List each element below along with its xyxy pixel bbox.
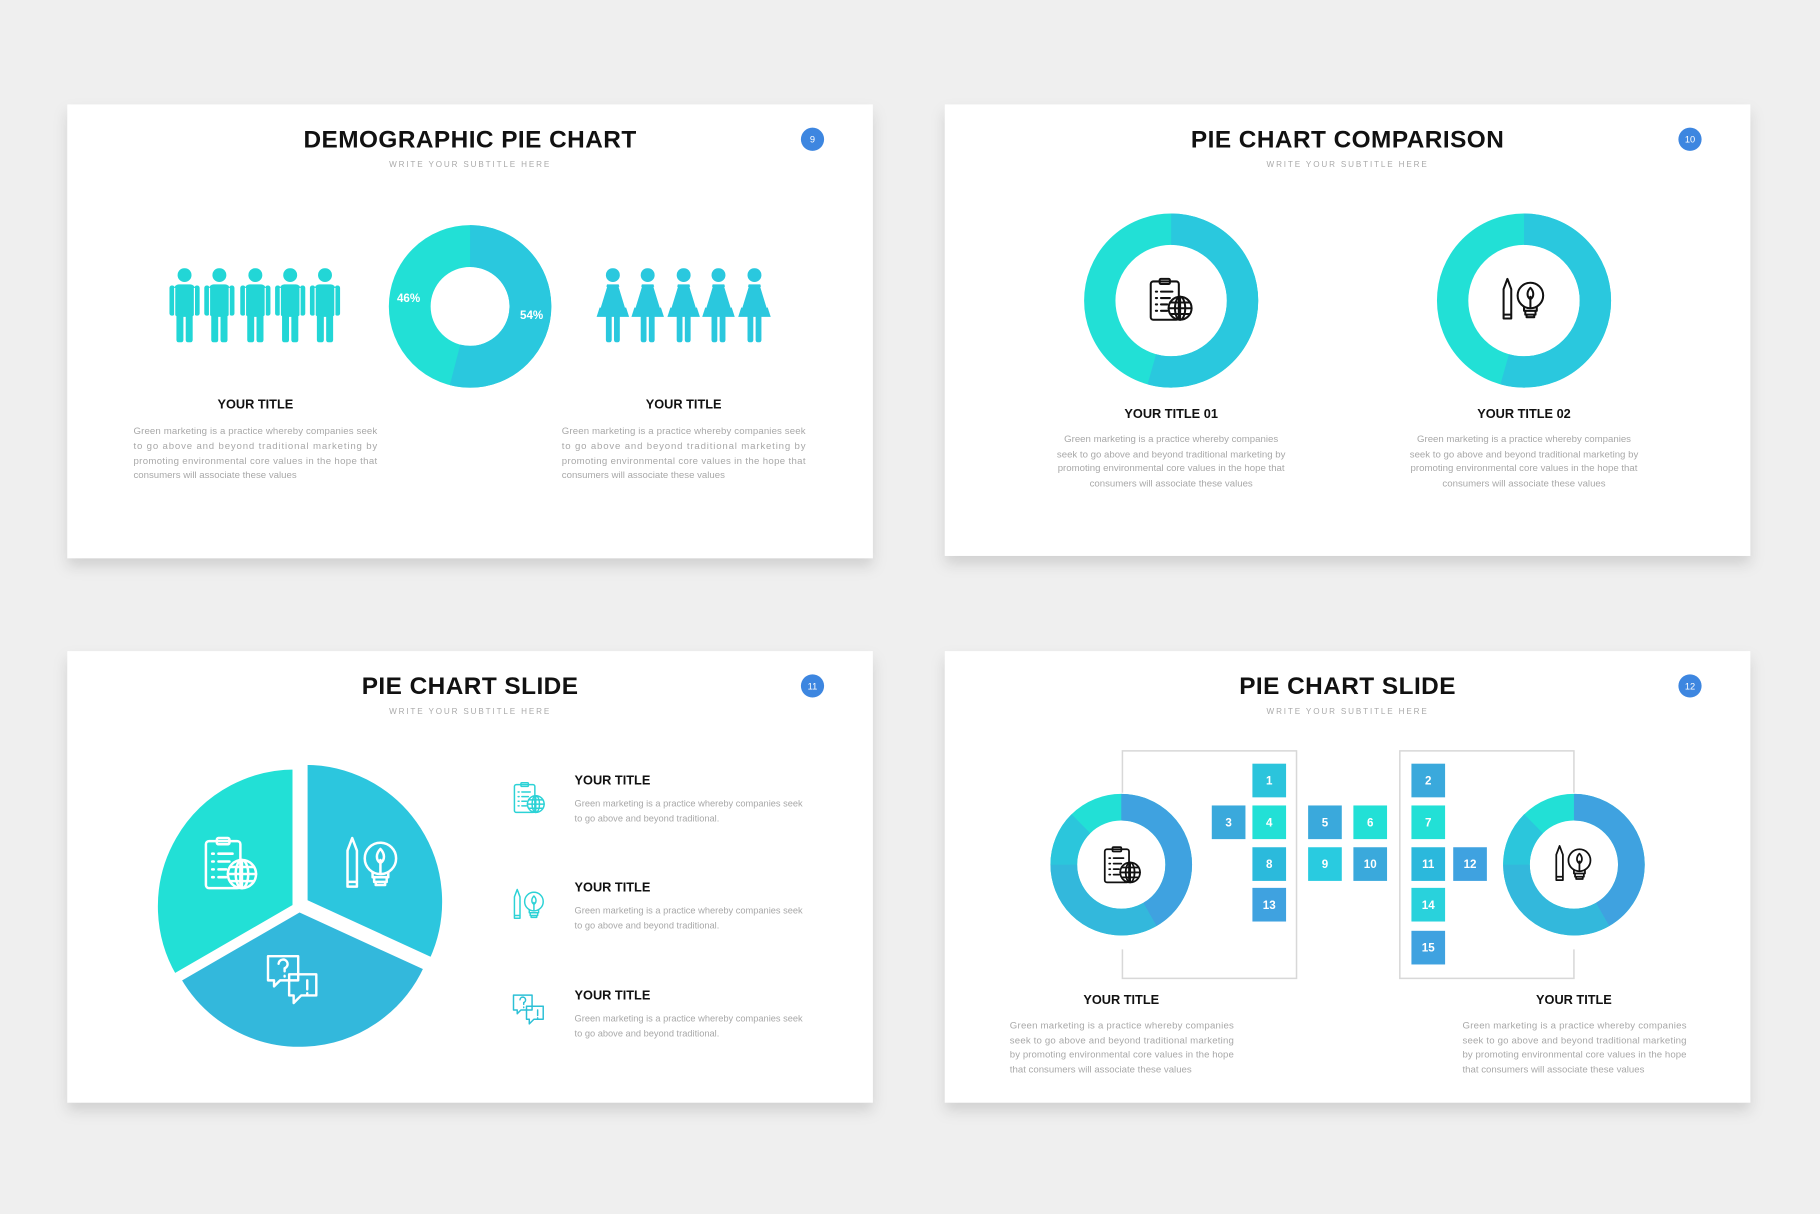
list item 3: YOUR TITLE: [575, 987, 650, 1002]
numbered squares: 11: [1422, 858, 1435, 871]
icon: men figures: [169, 268, 340, 342]
text block 01: consumers will associate these values: [1090, 478, 1253, 489]
subtitle: WRITE YOUR SUBTITLE HERE: [1267, 707, 1429, 716]
text block: left: [133, 397, 378, 481]
badge 12: 12: [1685, 681, 1695, 691]
title: DEMOGRAPHIC PIE CHART: [303, 126, 637, 153]
text block 02: YOUR TITLE 02: [1477, 406, 1571, 421]
text block: left: seek to go above and beyond traditional marketing: [1010, 1035, 1234, 1046]
numbered squares: 10: [1364, 858, 1377, 871]
list item 2: YOUR TITLE: [575, 879, 650, 894]
icon: women figures: [597, 268, 771, 342]
numbered squares: 2: [1425, 775, 1431, 788]
numbered squares: 6: [1367, 816, 1374, 829]
badge 12: [1678, 674, 1702, 698]
text block 02: promoting environmental core values in the hope that: [1411, 463, 1638, 474]
list item 2: Green marketing is a practice whereby companies seek: [575, 905, 803, 915]
badge 11: [801, 674, 824, 698]
text block: left: consumers will associate these values: [133, 470, 297, 481]
text block 01: [1057, 406, 1286, 489]
text block: left: promoting environmental core values in the hope that: [133, 456, 378, 467]
text block: right: [562, 397, 806, 481]
text block 01: seek to go above and beyond traditional marketing by: [1057, 449, 1286, 460]
panel: demographic pie chart: [67, 104, 873, 558]
text block 02: Green marketing is a practice whereby companies: [1417, 434, 1631, 445]
panel: pie chart slide 11: [67, 651, 873, 1103]
text block: right: to go above and beyond traditional marketing by: [562, 441, 806, 452]
text block: right: seek to go above and beyond traditional marketing: [1463, 1035, 1687, 1046]
title: PIE CHART COMPARISON: [1191, 126, 1504, 153]
list item 1: [514, 773, 803, 824]
text block 01: YOUR TITLE 01: [1124, 406, 1218, 421]
text block: right: YOUR TITLE: [1536, 992, 1612, 1007]
text block 02: seek to go above and beyond traditional marketing by: [1410, 449, 1638, 460]
text block: right: Green marketing is a practice whereby companies: [1463, 1020, 1687, 1031]
numbered squares: 15: [1422, 942, 1435, 955]
text block 01: promoting environmental core values in the hope that: [1058, 463, 1285, 474]
numbered squares: [1212, 764, 1487, 964]
donut 1: [1100, 229, 1243, 372]
panel: pie chart comparison: [945, 104, 1750, 556]
donut chart 46/54: 46%: [397, 292, 420, 305]
panel: pie chart slide 12: [945, 651, 1750, 1103]
badge 11: 11: [808, 681, 817, 691]
text block: left: Green marketing is a practice whereby companies: [1010, 1020, 1234, 1031]
text block: left: [1010, 992, 1234, 1075]
text block: left: to go above and beyond traditional marketing by: [133, 441, 377, 452]
text block: right: [1462, 992, 1687, 1075]
text block: left: YOUR TITLE: [1083, 992, 1159, 1007]
numbered squares: 9: [1322, 858, 1329, 871]
badge 10: 10: [1685, 135, 1695, 145]
text block: right: promoting environmental core values in the hope that: [562, 456, 806, 467]
donut right: [1516, 807, 1631, 922]
text block: right: Green marketing is a practice whereby companies seek: [562, 426, 806, 437]
list item 3: [514, 987, 803, 1038]
title: PIE CHART SLIDE: [1239, 673, 1456, 700]
subtitle: WRITE YOUR SUBTITLE HERE: [1267, 160, 1429, 169]
donut 2: [1453, 229, 1595, 372]
numbered squares: 5: [1322, 816, 1329, 829]
list item 1: YOUR TITLE: [575, 773, 650, 788]
numbered squares: 4: [1266, 816, 1273, 829]
badge 9: 9: [810, 135, 815, 145]
numbered squares: 8: [1266, 858, 1273, 871]
exploded pie: [156, 763, 444, 1049]
donut chart 46/54: [397, 246, 543, 367]
text block: left: Green marketing is a practice whereby companies seek: [133, 426, 377, 437]
list item 2: [514, 879, 803, 930]
donut chart 46/54: 54%: [520, 309, 543, 322]
text block: left: that consumers will associate these values: [1010, 1064, 1192, 1075]
list item 3: Green marketing is a practice whereby companies seek: [575, 1013, 803, 1023]
text block: right: that consumers will associate these values: [1463, 1064, 1645, 1075]
numbered squares: 1: [1266, 775, 1273, 788]
subtitle: WRITE YOUR SUBTITLE HERE: [389, 707, 551, 716]
text block: right: YOUR TITLE: [646, 397, 722, 412]
list item 1: Green marketing is a practice whereby companies seek: [575, 799, 803, 809]
text block: left: by promoting environmental core values in the hope: [1010, 1049, 1234, 1060]
subtitle: WRITE YOUR SUBTITLE HERE: [389, 160, 551, 169]
badge 10: [1678, 128, 1702, 151]
numbered squares: 12: [1464, 858, 1476, 871]
text block: right: consumers will associate these values: [562, 470, 725, 481]
list item 3: to go above and beyond traditional.: [575, 1028, 719, 1038]
text block 01: Green marketing is a practice whereby companies: [1064, 434, 1278, 445]
text block 02: [1410, 406, 1638, 489]
numbered squares: 3: [1225, 816, 1232, 829]
numbered squares: 13: [1263, 899, 1276, 912]
text block 02: consumers will associate these values: [1442, 478, 1606, 489]
text block: right: by promoting environmental core values in the hope: [1463, 1049, 1687, 1060]
numbered squares: 7: [1425, 816, 1431, 829]
text block: left: YOUR TITLE: [217, 397, 293, 412]
numbered squares: 14: [1422, 899, 1435, 912]
badge 9: [801, 128, 824, 151]
list item 1: to go above and beyond traditional.: [575, 814, 719, 824]
title: PIE CHART SLIDE: [362, 673, 578, 700]
donut left: [1064, 807, 1179, 922]
list item 2: to go above and beyond traditional.: [575, 920, 719, 930]
